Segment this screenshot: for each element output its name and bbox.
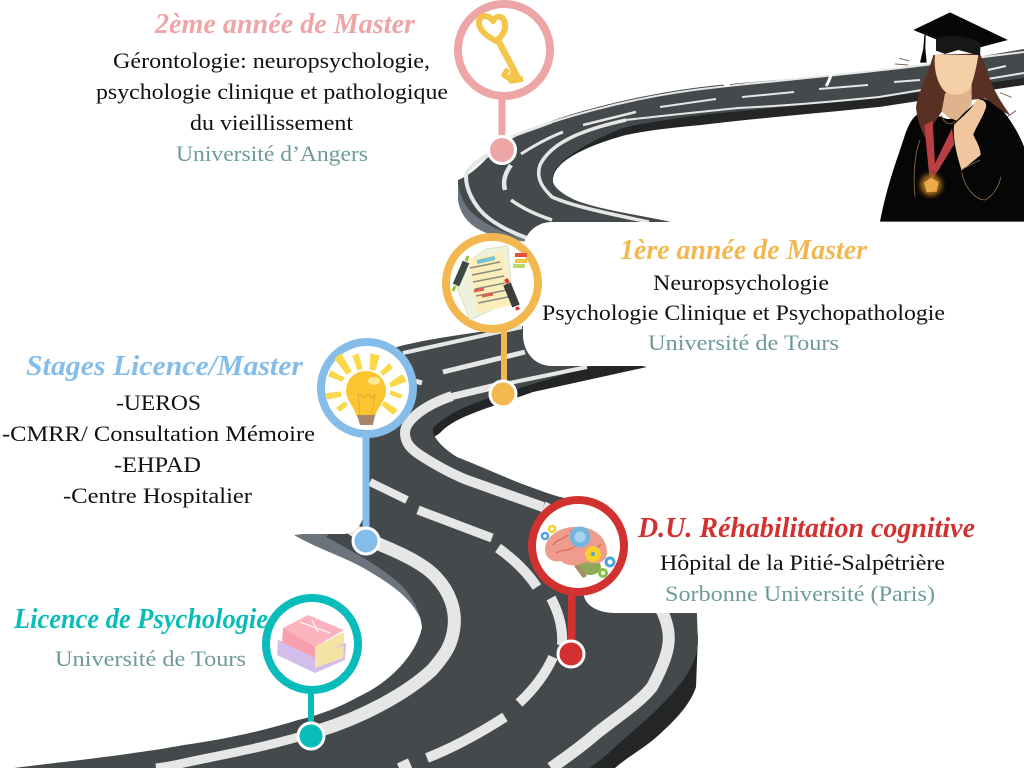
connector stem	[568, 590, 576, 645]
marker dot	[353, 528, 379, 554]
badge ring	[458, 4, 550, 96]
badge ring	[266, 598, 358, 690]
university: Sorbonne Université (Paris)	[665, 581, 935, 606]
badge ring	[532, 500, 624, 592]
white panel	[523, 222, 1024, 366]
heading: 2ème année de Master	[154, 8, 416, 40]
icon: notes and highlighters	[453, 246, 527, 320]
cap board	[913, 12, 1008, 47]
list of placements: -EHPAD	[114, 452, 201, 477]
icon: light bulb	[326, 354, 406, 425]
step: Licence de Psychologie	[13, 598, 358, 749]
hair	[916, 53, 1011, 137]
badge ring	[321, 342, 413, 434]
medal glow	[916, 170, 946, 200]
marker dot	[298, 723, 324, 749]
list of placements: -Centre Hospitalier	[63, 483, 253, 508]
hand and arm	[954, 100, 986, 171]
step: D.U. Réhabilitation cognitive	[532, 500, 1024, 667]
tassel	[920, 35, 927, 63]
icon: brain with gears	[542, 526, 614, 578]
graduate figure	[880, 12, 1024, 222]
step: 1ère année de Master	[446, 222, 1024, 407]
neck	[942, 83, 972, 121]
description: Neuropsychologie	[653, 270, 829, 295]
university: Université de Tours	[55, 646, 246, 671]
connector stem	[501, 325, 507, 385]
cap band	[936, 36, 981, 56]
description: Psychologie Clinique et Psychopathologie	[542, 300, 945, 325]
description: Gérontologie: neuropsychologie,	[113, 48, 430, 73]
step: Stages Licence/Master	[0, 342, 413, 554]
description: du vieillissement	[190, 110, 353, 135]
list of placements: -UEROS	[116, 390, 201, 415]
medal ribbon	[924, 121, 954, 178]
list of placements: -CMRR/ Consultation Mémoire	[2, 421, 315, 446]
description: psychologie clinique et pathologique	[96, 79, 448, 104]
white panel	[0, 380, 363, 534]
list of placements	[2, 390, 315, 508]
badge ring	[446, 237, 538, 329]
motion marks	[895, 58, 1016, 117]
heading: Stages Licence/Master	[26, 350, 304, 382]
heading: D.U. Réhabilitation cognitive	[637, 512, 975, 544]
university: Université de Tours	[648, 330, 839, 355]
medal	[924, 178, 939, 192]
connector stem	[498, 95, 506, 140]
connector stem	[308, 688, 314, 728]
step: 2ème année de Master	[96, 4, 550, 166]
white panel	[583, 500, 1024, 613]
icon: stacked books	[277, 615, 346, 673]
connector stem	[362, 430, 370, 530]
marker dot	[490, 381, 516, 407]
icon: golden key	[479, 16, 523, 81]
university: Université d’Angers	[176, 141, 368, 166]
heading: Licence de Psychologie	[13, 603, 268, 635]
marker dot	[558, 641, 584, 667]
description: Hôpital de la Pitié-Salpêtrière	[660, 550, 945, 575]
gown	[880, 98, 1024, 222]
marker dot	[488, 136, 516, 164]
description	[96, 48, 448, 135]
heading: 1ère année de Master	[620, 234, 868, 266]
face	[935, 55, 978, 95]
gown trim	[914, 115, 1001, 200]
description	[542, 270, 945, 325]
